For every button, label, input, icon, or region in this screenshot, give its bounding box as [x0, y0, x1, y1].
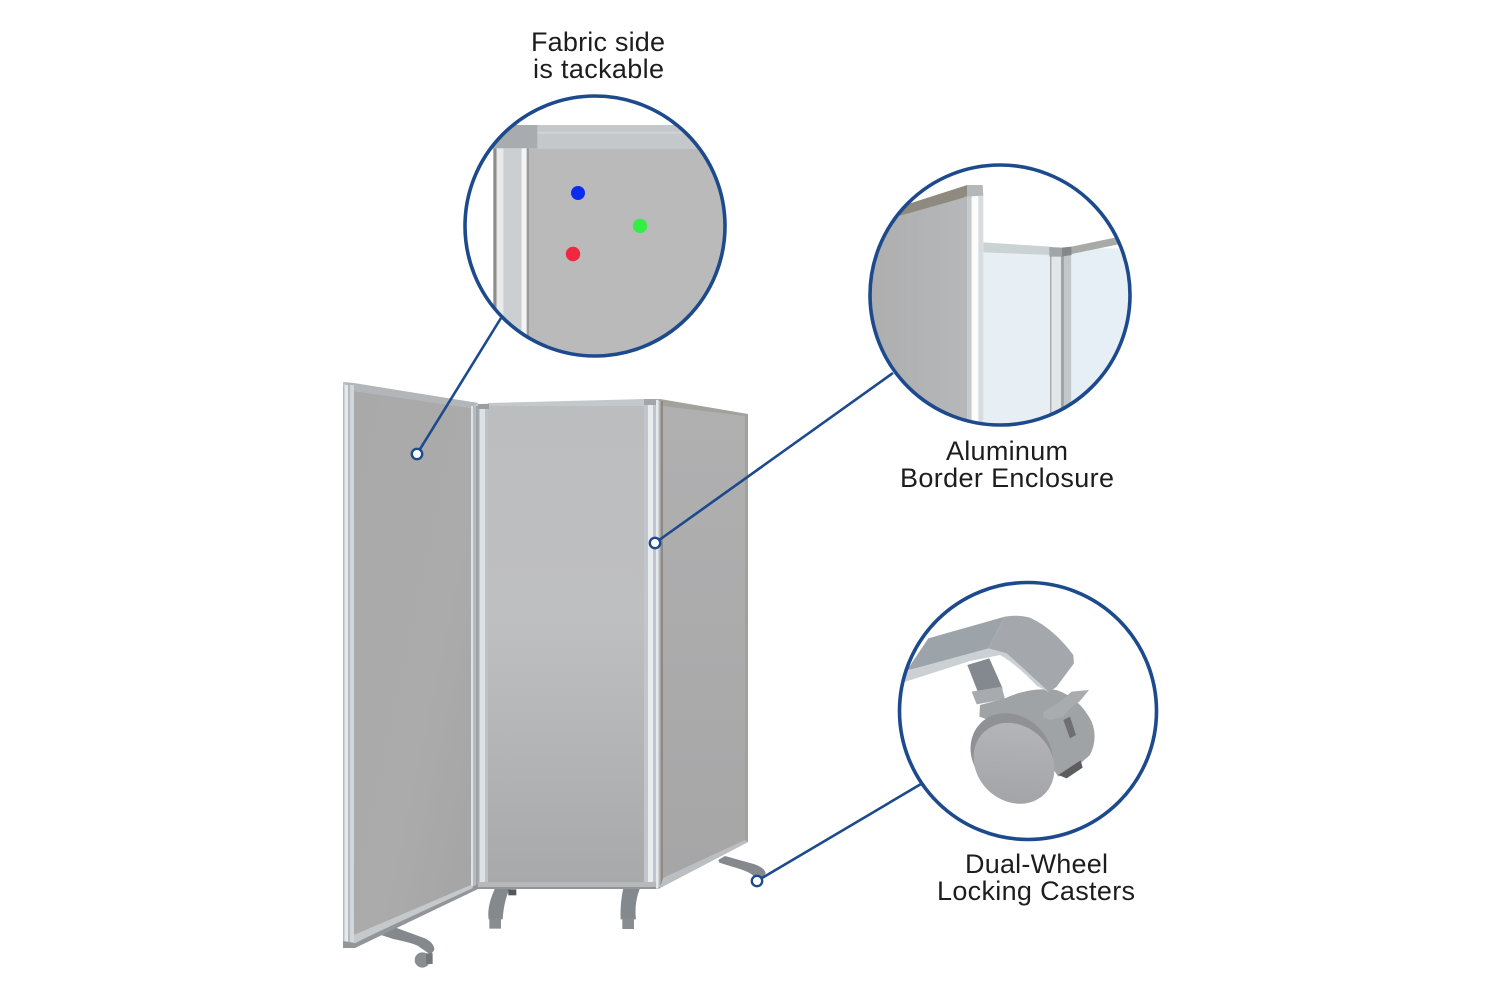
- connector: casters: [757, 784, 921, 881]
- connector: aluminum border: [655, 373, 893, 543]
- caster legs: [380, 856, 766, 968]
- marker: fabric side: [412, 449, 422, 459]
- label: dual-wheel locking casters: Locking Casters: [937, 876, 1135, 906]
- left panel: [343, 382, 478, 948]
- label: aluminum border enclosure: Aluminum: [946, 436, 1068, 466]
- pin: blue: [571, 186, 585, 200]
- pin: green: [633, 219, 647, 233]
- label: fabric side: [531, 27, 665, 84]
- label: aluminum border enclosure: [900, 436, 1114, 493]
- marker: casters: [752, 876, 762, 886]
- centre panel: [478, 399, 660, 889]
- label: dual-wheel locking casters: Dual-Wheel: [965, 849, 1108, 879]
- marker: aluminum border: [650, 538, 660, 548]
- connector: fabric side: [417, 318, 501, 454]
- pin: red: [566, 247, 580, 261]
- right panel: [656, 399, 748, 888]
- label: dual-wheel locking casters: [937, 849, 1135, 906]
- product: three-panel partition: [343, 382, 766, 968]
- label: fabric side: is tackable: [533, 54, 664, 84]
- label: aluminum border enclosure: Border Enclosure: [900, 463, 1114, 493]
- label: fabric side: Fabric side: [531, 27, 665, 57]
- callout circle: aluminum border: [860, 165, 1138, 432]
- callout circle: dual-wheel caster: [900, 582, 1156, 840]
- callout circle: fabric side with pins: [465, 96, 737, 365]
